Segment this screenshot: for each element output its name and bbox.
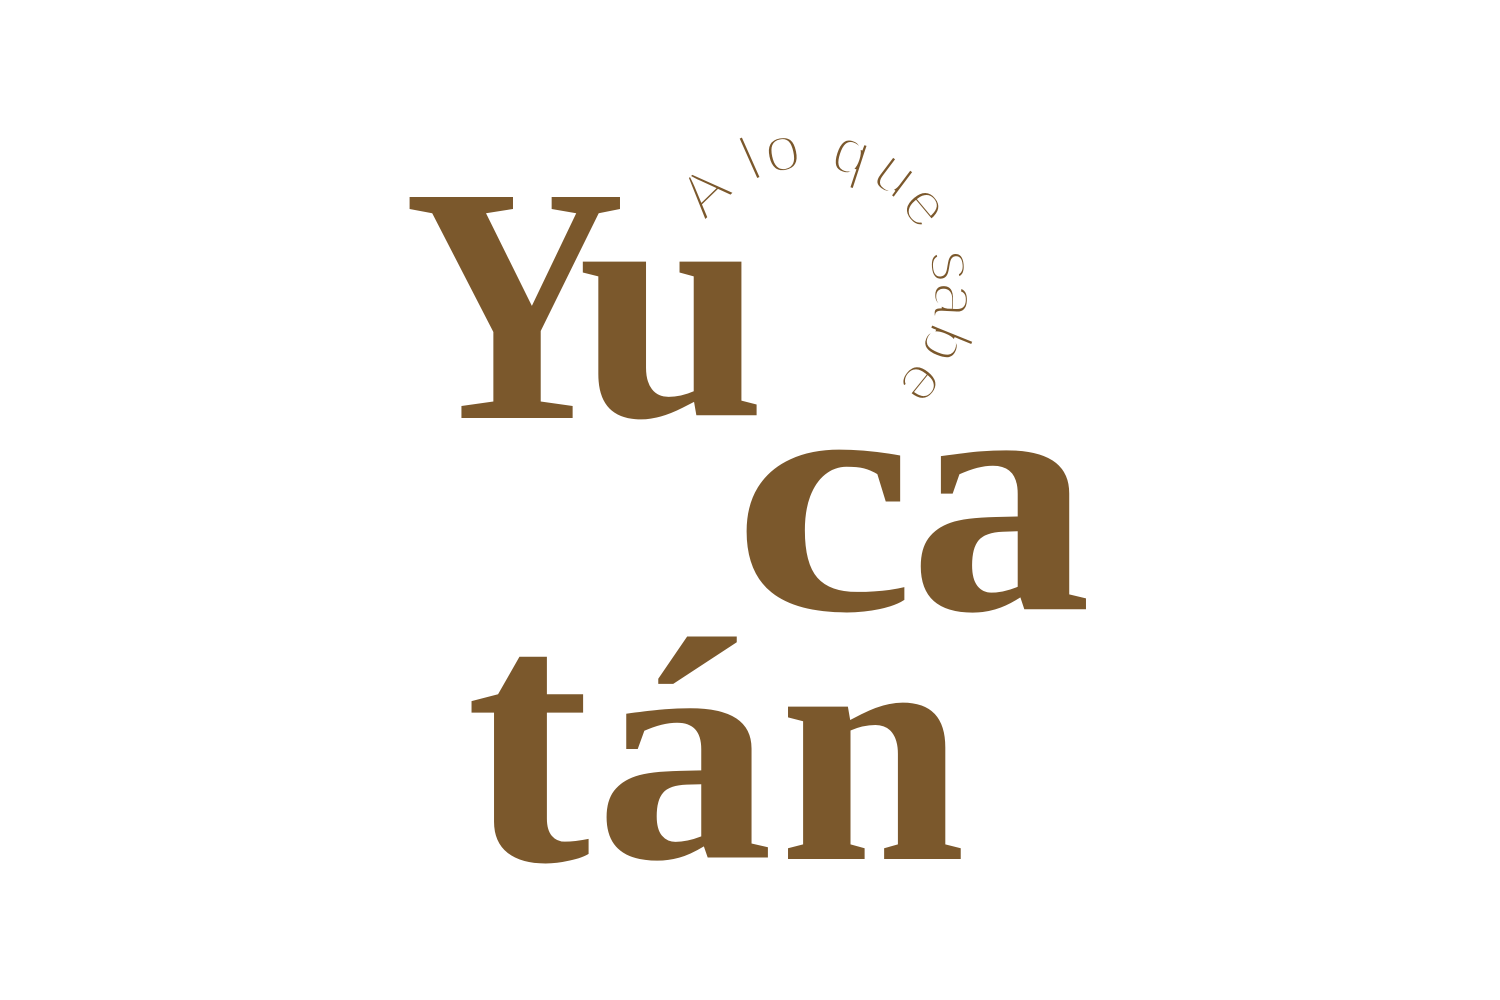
title line 3: tán: t	[466, 538, 594, 939]
curved tagline: A lo que sabe: o	[757, 110, 807, 188]
curved tagline: A lo que sabe: a	[919, 281, 993, 320]
title line 2: ca: a	[909, 308, 1092, 683]
title line 3: tán: á	[595, 575, 773, 927]
curved tagline: A lo que sabe: A	[664, 150, 745, 232]
curved tagline: A lo que sabe: s	[916, 246, 990, 285]
title line 3: tán: n	[779, 564, 966, 932]
curved tagline: A lo que sabe	[664, 110, 993, 422]
curved tagline: A lo que sabe: e	[888, 168, 966, 242]
title line 1: Yu: Y	[404, 118, 626, 491]
title line 3: tán	[466, 538, 966, 939]
logo: Yucatán	[404, 117, 1092, 939]
title line 2: ca	[733, 308, 1092, 683]
curved tagline: A lo que sabe: b	[907, 314, 987, 374]
title line 1: Yu	[404, 117, 766, 491]
curved tagline: A lo que sabe: q	[824, 113, 880, 192]
title line 1: Yu: u	[578, 117, 766, 488]
curved tagline: A lo que sabe: l	[729, 123, 771, 195]
title line 2: ca: c	[733, 308, 915, 683]
curved tagline: A lo que sabe: u	[861, 134, 932, 213]
curved tagline: A lo que sabe: e	[884, 349, 963, 422]
